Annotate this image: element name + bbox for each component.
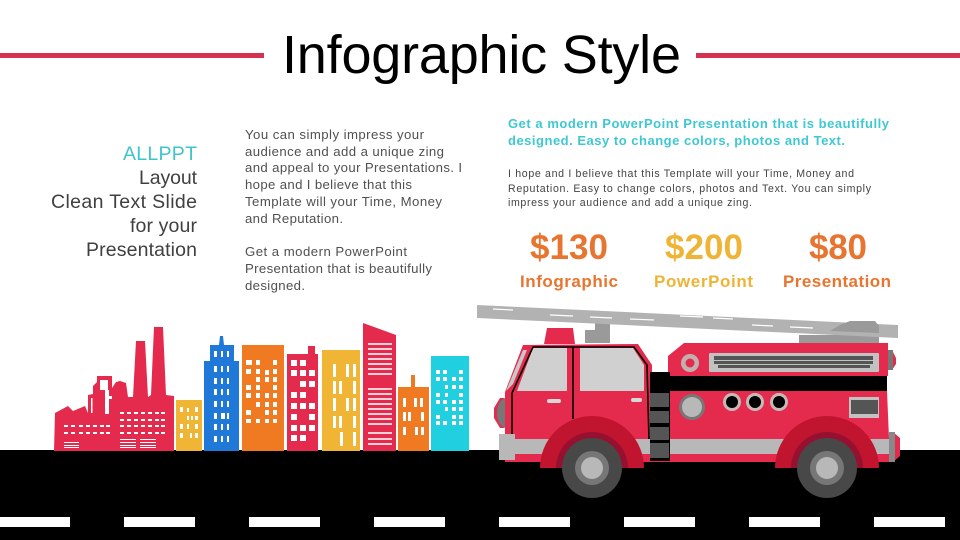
cab	[505, 344, 652, 462]
stat: $80 Presentation: Presentation	[783, 272, 891, 291]
red building	[287, 346, 318, 451]
stat: $130 Infographic: $130	[530, 228, 608, 267]
small orange building	[398, 375, 429, 451]
middle text block	[245, 127, 462, 293]
portholes	[723, 393, 788, 411]
blue tower	[204, 336, 239, 451]
middle text block: You can simply impress your	[245, 127, 425, 142]
right heading	[508, 116, 890, 148]
right body text: I hope and I believe that this Template will your Time, Money and	[508, 168, 854, 180]
stat: $130 Infographic: Infographic	[520, 272, 618, 291]
stat: $80 Presentation: $80	[809, 228, 867, 267]
right body text	[508, 168, 872, 209]
truck body	[650, 343, 890, 462]
middle text block: Get a modern PowerPoint	[245, 244, 407, 259]
factory	[54, 327, 174, 451]
middle text block: audience and add a unique zing	[245, 144, 444, 159]
right heading: Get a modern PowerPoint Presentation that is beautifully	[508, 116, 890, 131]
left text block: Layout	[139, 167, 198, 189]
tall red building	[363, 323, 396, 451]
orange building	[242, 345, 284, 451]
beacon	[544, 328, 575, 344]
middle text block: Presentation that is beautifully	[245, 261, 432, 276]
road	[0, 450, 960, 540]
left text block: Clean Text Slide	[51, 191, 197, 213]
title with side rules: Infographic Style	[282, 25, 681, 85]
stat: $200 PowerPoint	[654, 228, 753, 291]
stat: $130 Infographic	[520, 228, 618, 291]
cyan building	[431, 356, 469, 451]
yellow building	[322, 350, 360, 451]
right body text: Reputation. Easy to change colors, photos and Text. You can simply	[508, 183, 872, 195]
rear lights	[888, 350, 900, 462]
roof mounts	[585, 317, 879, 343]
front bumper and headlight	[494, 398, 515, 460]
middle text block: hope and I believe that this	[245, 177, 412, 192]
left text block: Presentation	[86, 239, 197, 261]
left text block: ALLPPT	[123, 143, 197, 165]
small yellow building	[176, 400, 202, 451]
rear ladder dome	[830, 321, 879, 333]
middle text block: and Reputation.	[245, 211, 343, 226]
left text block: for your	[130, 215, 198, 237]
rear wheel	[775, 416, 879, 498]
stat: $80 Presentation	[783, 228, 891, 291]
city skyline	[54, 323, 469, 451]
stat: $200 PowerPoint: $200	[665, 228, 743, 267]
stat: $200 PowerPoint: PowerPoint	[654, 272, 753, 291]
title with side rules	[0, 25, 960, 85]
middle text block: Template will your Time, Money	[245, 194, 442, 209]
left text block	[51, 143, 198, 261]
gauge	[681, 354, 699, 372]
middle text block: and appeal to your Presentations. I	[245, 160, 462, 175]
right heading: designed. Easy to change colors, photos and Text.	[508, 133, 845, 148]
right body text: impress your audience and add a unique zing.	[508, 197, 752, 209]
ladder	[477, 305, 898, 338]
fire truck	[477, 305, 900, 498]
middle text block: designed.	[245, 278, 305, 293]
upper compartment grille	[709, 353, 879, 372]
front wheel	[540, 416, 644, 498]
round hatch	[679, 394, 705, 420]
side vent	[849, 397, 879, 418]
